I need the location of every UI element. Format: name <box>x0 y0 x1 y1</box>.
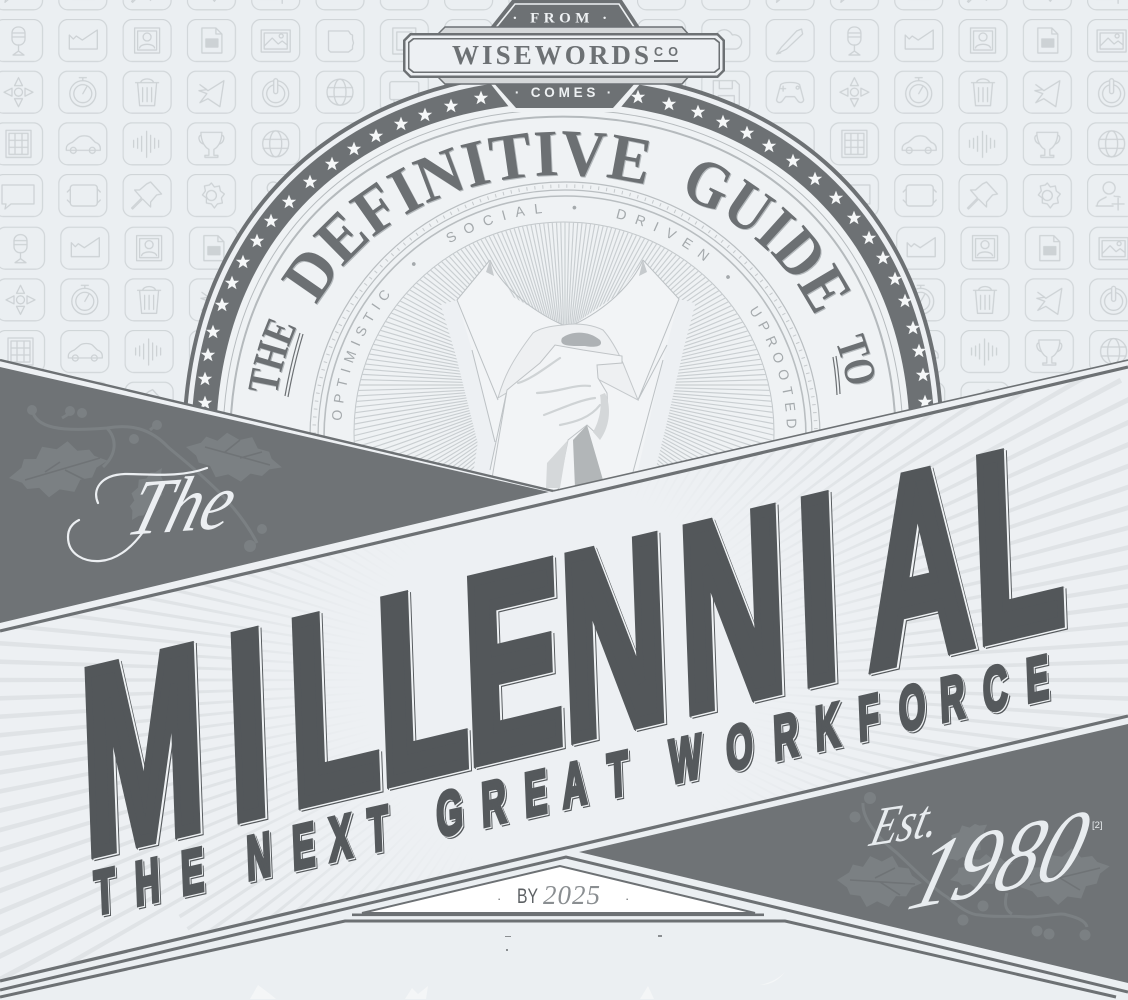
knot shadow <box>561 333 601 347</box>
icon tile pattern <box>0 0 1128 403</box>
left banner: the <box>0 360 553 623</box>
chevron rules <box>0 716 1128 997</box>
comes text: · COMES · <box>515 85 615 100</box>
fingers shading <box>518 358 600 425</box>
the script flourish <box>68 468 207 561</box>
1980 text: 1980 <box>898 786 1102 932</box>
central banner <box>0 359 1128 979</box>
holly sprig left <box>4 405 287 552</box>
heading: the definitive guide to: DEFINITIVE GUIDE <box>280 131 852 314</box>
cuff shadow <box>593 393 609 440</box>
footnote marker: [2] <box>1092 820 1103 831</box>
circular seal <box>184 84 942 490</box>
subtitle: the next great workforce: THE NEXT GREAT WORKFORCE <box>93 641 1050 929</box>
comes plate <box>486 78 645 112</box>
from text: · FROM · <box>512 10 612 26</box>
by 2025 tag: BY <box>517 884 538 908</box>
banner top rules <box>0 367 1128 631</box>
heading: the definitive guide to: THE <box>248 318 297 392</box>
faint bottom leaves <box>250 972 785 999</box>
est text: Est. <box>864 787 947 859</box>
collar outlines <box>457 260 679 472</box>
by 2025 tag: · <box>625 891 629 906</box>
2025 text: 2025 <box>543 880 601 910</box>
specks <box>505 935 662 951</box>
seal outer rings and star band <box>182 69 944 567</box>
main title: millennial: MILLENNIAL <box>76 385 1068 911</box>
knot <box>498 324 638 400</box>
shirt and collar base <box>457 260 679 492</box>
heading: the definitive guide to <box>248 131 876 392</box>
sunburst rays <box>354 222 774 470</box>
plate back strips <box>436 27 690 36</box>
heading rules <box>285 333 840 397</box>
co mark: CO <box>654 45 678 59</box>
hand <box>490 345 622 490</box>
illustration: hand tightening tie <box>457 260 679 492</box>
tie <box>573 425 604 488</box>
from plate <box>489 0 641 29</box>
wisewords nameplate <box>403 0 725 112</box>
ring text: traits: OPTIMISTIC • SOCIAL • DRIVEN • UPROOTED <box>332 204 796 428</box>
holly sprig right <box>836 792 1115 940</box>
inner rings <box>310 182 820 692</box>
by text: · <box>497 891 501 906</box>
collar tips <box>486 260 647 276</box>
shirt fold shadow <box>546 440 568 488</box>
wisewords text: WISEWORDS <box>452 40 649 70</box>
banner rays <box>0 378 1128 980</box>
heading: the definitive guide to: TO <box>837 332 876 384</box>
plate body <box>403 33 725 78</box>
stars <box>198 90 932 409</box>
right banner: est 1980 <box>579 724 1128 983</box>
co underline <box>654 60 678 62</box>
the script word: The <box>119 457 247 553</box>
by 2025 tag <box>352 866 764 916</box>
